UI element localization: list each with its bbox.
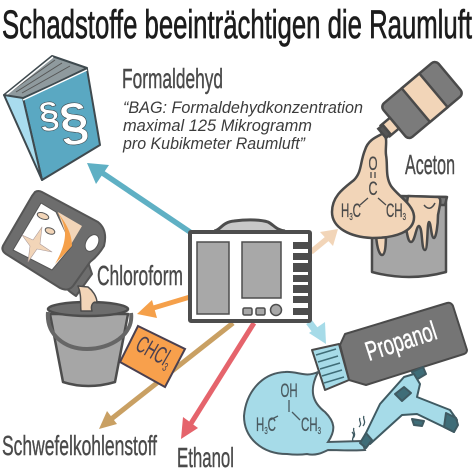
icon: acetone blob: [332, 133, 414, 238]
formula: propanol: [256, 381, 321, 437]
formula: acetone: H: [341, 201, 355, 222]
icon: propanol puddle: [244, 372, 365, 455]
formula: acetone: [341, 154, 406, 223]
icon: measuring device: [190, 220, 310, 321]
quote text: maximal 125 Mikrogramm: [123, 116, 312, 135]
formula: acetone: C: [368, 179, 378, 200]
icon: bucket: [48, 286, 131, 386]
arrow: to Ethanol: [181, 323, 254, 439]
label: Schwefelkohlenstoff: Schwefelkohlenstoff: [2, 430, 157, 461]
formula: propanol: C: [268, 415, 276, 436]
icon: canister: [2, 191, 105, 296]
quote text: [122, 98, 363, 153]
formula: acetone: 3: [349, 212, 353, 223]
arrow: to Propanol: [309, 322, 326, 344]
icon: law book: [4, 56, 100, 180]
arrow: to Chloroform: [137, 297, 190, 318]
quote text: pro Kubikmeter Raumluft”: [122, 134, 306, 153]
formula: acetone: 3: [403, 212, 406, 223]
formula: propanol: 3: [318, 426, 321, 437]
icon: hot glue gun: [360, 367, 458, 448]
icon: propanol bottle: Propanol: [362, 316, 440, 367]
label: Ethanol: Ethanol: [177, 442, 234, 473]
formula: acetone: O: [368, 154, 378, 175]
quote text: “BAG: Formaldehydkonzentration: [123, 98, 363, 117]
formula: propanol: OH: [280, 381, 298, 402]
arrow: to Aceton: [311, 229, 338, 252]
tag: CHCl3: [120, 326, 185, 387]
icon: paint can: [372, 196, 447, 277]
formula: acetone: CH: [386, 201, 413, 222]
icon: glue fumes: [352, 416, 365, 441]
label: Formaldehyd: Formaldehyd: [122, 63, 223, 94]
formula: propanol: 3: [264, 426, 268, 437]
tag: CHCl3: CHCl: [131, 331, 194, 383]
icon: pouring bottle: [368, 60, 464, 150]
arrow: to Schwefelkohlenstoff: [99, 323, 233, 429]
icon: propanol bottle: [312, 303, 467, 390]
formula: propanol: CH: [301, 415, 328, 436]
icon: law book: §: [56, 91, 92, 153]
label: Chloroform: Chloroform: [97, 260, 183, 291]
tag: CHCl3: 3: [160, 360, 171, 374]
formula: acetone: C: [353, 201, 361, 222]
icon: law book: §: [36, 93, 62, 136]
formula: propanol: H: [256, 415, 270, 436]
arrow: to Formaldehyd: [87, 163, 190, 232]
